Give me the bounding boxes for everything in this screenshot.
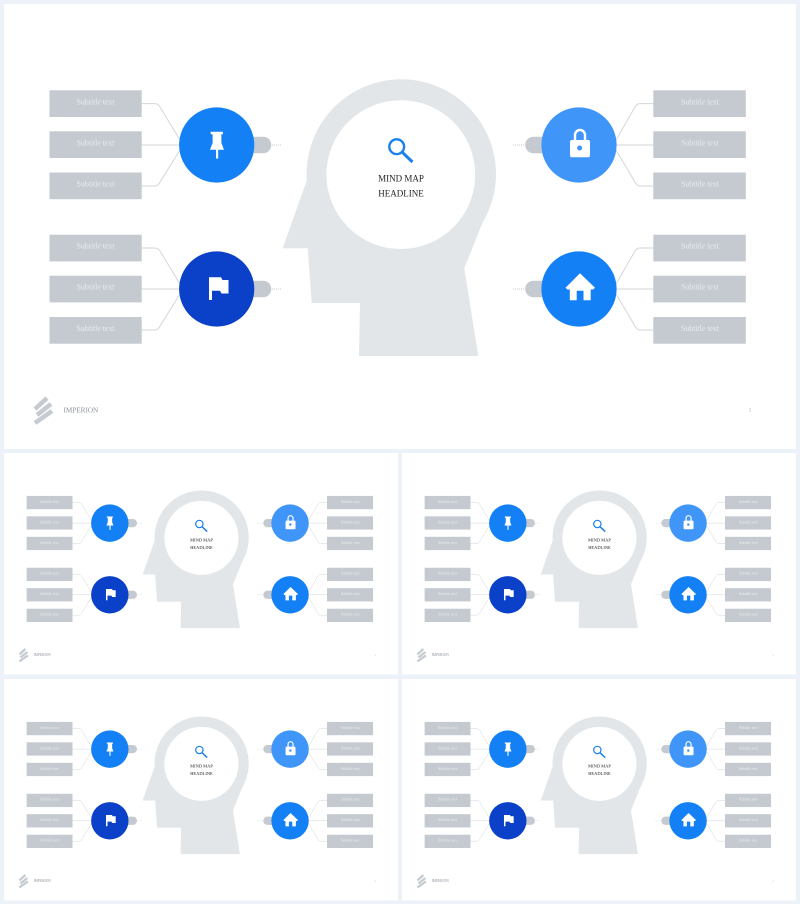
branch: flag: Subtitle text [76,324,115,333]
headline: HEADLINE [378,189,424,199]
slide thumbnail: top right: Subtitle text [739,519,759,524]
slide thumbnail: bottom left: Subtitle text [40,745,60,750]
slide thumbnail: top right: Subtitle text [438,540,458,545]
slide thumbnail: top left [4,453,398,674]
slide thumbnail: bottom left: Subtitle text [40,838,60,843]
slide thumbnail: bottom left: Subtitle text [341,838,361,843]
slide thumbnail: top left: Subtitle text [341,612,361,617]
slide thumbnail: top right [402,453,796,674]
slide thumbnail: top left: Subtitle text [341,519,361,524]
slide thumbnail: bottom right: Subtitle text [739,745,759,750]
headline: MIND MAP [378,174,424,184]
slide thumbnail: bottom right: HEADLINE [588,771,611,776]
slide thumbnail: bottom right [402,679,796,900]
slide thumbnail: top left: Subtitle text [341,571,361,576]
slide thumbnail: bottom left: Subtitle text [341,725,361,730]
branch: flag: Subtitle text [76,242,115,251]
slide thumbnail: bottom right: Subtitle text [438,725,458,730]
slide thumbnail: bottom right: Subtitle text [438,797,458,802]
slide thumbnail: top left: Subtitle text [40,612,60,617]
branch: pin: Subtitle text [76,138,115,147]
slide thumbnail: bottom left: HEADLINE [190,771,213,776]
slide thumbnail: bottom right: Subtitle text [739,797,759,802]
branch: home [513,235,746,344]
slide thumbnail: bottom left: Subtitle text [341,797,361,802]
slide thumbnail: bottom left: IMPERION [34,879,51,883]
logo mark [35,398,52,423]
slide thumbnail: top right: MIND MAP [588,537,611,542]
slide thumbnail: bottom left: Subtitle text [341,817,361,822]
slide thumbnail: top left: Subtitle text [40,571,60,576]
slide thumbnail: top left: MIND MAP [190,537,213,542]
branch: lock [513,90,746,199]
slide thumbnail: bottom right: Subtitle text [438,817,458,822]
slide thumbnail: top right: HEADLINE [588,545,611,550]
slide thumbnail: top left: Subtitle text [341,499,361,504]
slide thumbnail: bottom left: Subtitle text [341,745,361,750]
slide thumbnail: top right: 1 [772,653,774,657]
slide thumbnail: top left: Subtitle text [40,519,60,524]
branch: pin: Subtitle text [76,97,115,106]
slide thumbnail: bottom left: Subtitle text [341,766,361,771]
branch: flag: Subtitle text [76,283,115,292]
slide thumbnail: bottom right: 1 [772,879,774,883]
slide thumbnail: bottom left [4,679,398,900]
page number: 1 [748,408,752,414]
branch: lock: Subtitle text [681,97,720,106]
slide thumbnail: bottom right: IMPERION [432,879,449,883]
slide thumbnail: top right: IMPERION [432,653,449,657]
slide thumbnail: bottom right: Subtitle text [438,766,458,771]
slide thumbnail: top right: Subtitle text [438,591,458,596]
slide thumbnail: top right: Subtitle text [438,612,458,617]
slide: main [4,4,796,449]
branch: pin: Subtitle text [76,180,115,188]
branch: lock: Subtitle text [681,138,720,147]
slide thumbnail: bottom right: Subtitle text [739,817,759,822]
head silhouette [283,79,496,356]
slide thumbnail: top left: Subtitle text [40,540,60,545]
slide thumbnail: bottom left: MIND MAP [190,763,213,768]
branch: pin [50,90,282,199]
slide thumbnail: top right: Subtitle text [739,612,759,617]
slide thumbnail: top left: HEADLINE [190,545,213,550]
branch: home: Subtitle text [681,242,720,251]
slide thumbnail: bottom right: Subtitle text [438,745,458,750]
slide thumbnail: top left: Subtitle text [341,540,361,545]
branch: home: Subtitle text [681,283,720,292]
slide thumbnail: top right: Subtitle text [438,499,458,504]
branch: lock: Subtitle text [681,180,720,188]
slide thumbnail: top right: Subtitle text [438,519,458,524]
slide thumbnail: top right: Subtitle text [739,591,759,596]
slide thumbnail: top left: 1 [374,653,376,657]
slide thumbnail: bottom right: MIND MAP [588,763,611,768]
slide thumbnail: bottom left: Subtitle text [40,797,60,802]
slide thumbnail: top right: Subtitle text [438,571,458,576]
slide thumbnail: bottom right: Subtitle text [739,725,759,730]
branch: home: Subtitle text [681,324,720,333]
slide thumbnail: top right: Subtitle text [739,499,759,504]
slide thumbnail: bottom right: Subtitle text [438,838,458,843]
slide thumbnail: top left: Subtitle text [40,499,60,504]
slide thumbnail: bottom right: Subtitle text [739,766,759,771]
slide thumbnail: top left: IMPERION [34,653,51,657]
slide thumbnail: bottom left: 1 [374,879,376,883]
slide thumbnail: bottom left: Subtitle text [40,725,60,730]
brand name: IMPERION [64,406,99,414]
slide thumbnail: top left: Subtitle text [341,591,361,596]
branch: flag [50,235,282,344]
head inner circle [326,100,475,249]
slide thumbnail: top left: Subtitle text [40,591,60,596]
slide thumbnail: bottom left: Subtitle text [40,817,60,822]
slide thumbnail: top right: Subtitle text [739,540,759,545]
slide thumbnail: bottom right: Subtitle text [739,838,759,843]
slide thumbnail: bottom left: Subtitle text [40,766,60,771]
icon: magnifier [389,139,412,162]
slide thumbnail: top right: Subtitle text [739,571,759,576]
